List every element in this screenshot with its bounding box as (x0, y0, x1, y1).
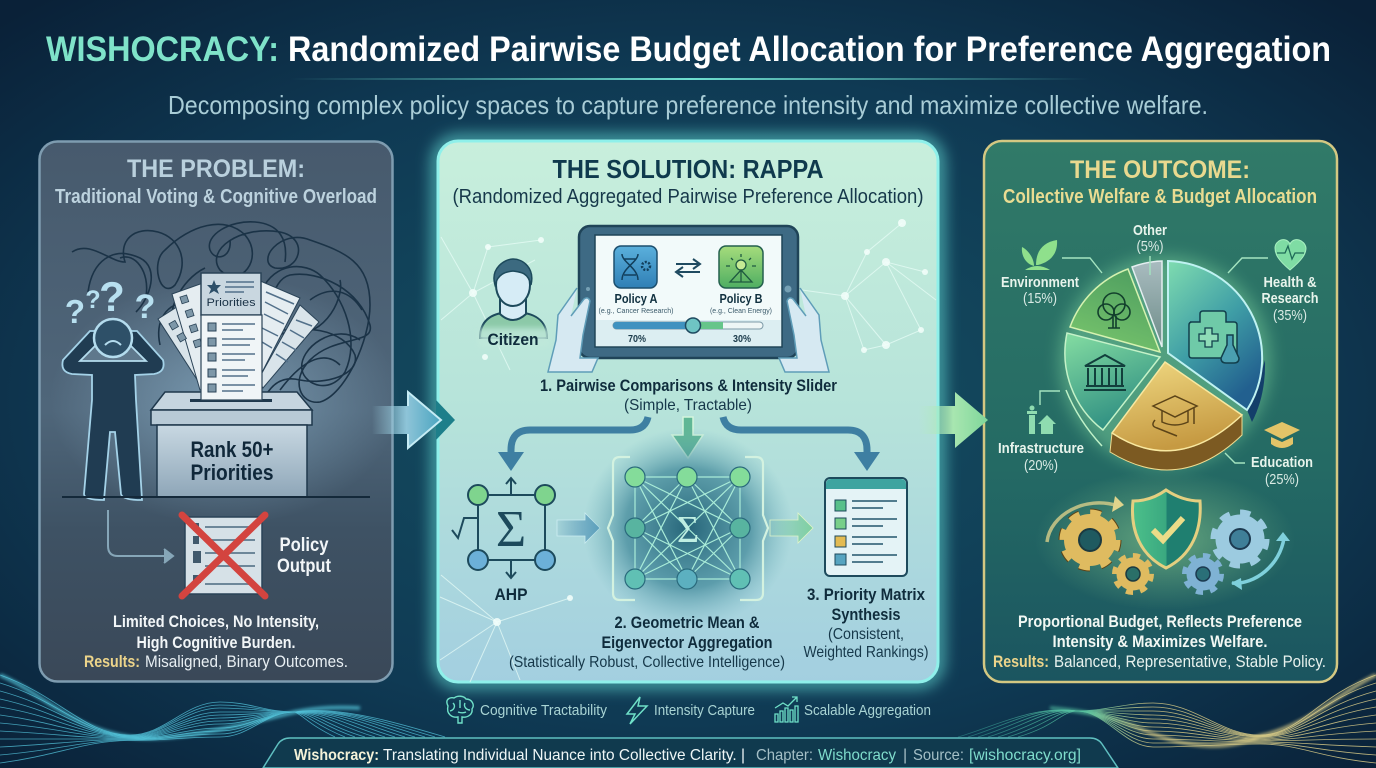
icon: aggregation network: Σ (677, 509, 699, 551)
problem subheading: Traditional Voting & Cognitive Overload (55, 186, 377, 208)
icon: swap arrows (676, 259, 700, 277)
icon: citizen: Citizen (488, 330, 538, 349)
decorative waves right (958, 675, 1376, 763)
panel: the problem (40, 142, 400, 682)
decorative waves left (0, 675, 445, 763)
footer bar: Source: (913, 747, 964, 764)
icon: heart (1275, 240, 1306, 270)
label: education: (25%) (1265, 471, 1299, 488)
icon: AHP: Σ (496, 501, 526, 558)
subtitle: Decomposing complex policy spaces to capture preference intensity and maximize collective welfare. (168, 90, 1208, 120)
arrow to output (108, 510, 173, 563)
problem summary: Results: (84, 652, 140, 671)
outcome summary: Proportional Budget, Reflects Preference (1018, 612, 1302, 631)
slider values: 30% (733, 334, 751, 345)
slice: infrastructure (1065, 333, 1160, 446)
icon: process gears and shield (1047, 490, 1290, 592)
arrow: to matrix (723, 417, 880, 471)
label: health and research: (35%) (1273, 307, 1307, 324)
icon: ballot box: Priorities (190, 460, 274, 485)
papers fan (158, 280, 319, 392)
arrow: problem to solution (372, 392, 455, 448)
step 1 text (540, 376, 837, 414)
label: health and research: Health & (1264, 274, 1317, 291)
icon: aggregation network (583, 428, 793, 628)
step 2 text: 2. Geometric Mean & (614, 613, 760, 632)
problem heading: THE PROBLEM: (127, 155, 305, 183)
small gold gear (1115, 556, 1151, 592)
label: other (1133, 222, 1167, 255)
question marks (65, 273, 155, 330)
slider values (628, 334, 751, 345)
icon: priorities card: Priorities (206, 297, 256, 309)
label: health and research: Research (1262, 290, 1318, 307)
solution heading: THE SOLUTION: RAPPA (552, 154, 824, 184)
citizen label (478, 328, 550, 348)
problem summary: Limited Choices, No Intensity, (113, 612, 319, 631)
arrow: solution to outcome (918, 392, 988, 448)
footer bar: Chapter: (756, 747, 813, 764)
pie chart (1059, 256, 1271, 470)
icon: confused person (62, 273, 164, 500)
outcome summary (993, 612, 1326, 671)
icon: lightning bolt (627, 697, 647, 724)
intensity slider (613, 318, 763, 333)
icon: graduation cap (1264, 422, 1300, 448)
step 3 text: (Consistent, (828, 626, 904, 643)
problem summary: Misaligned, Binary Outcomes. (145, 652, 348, 671)
footer text: Wishocracy: (294, 747, 379, 764)
question marks: ? (99, 273, 125, 320)
AHP label: AHP (494, 585, 528, 604)
problem summary (84, 612, 348, 671)
slider values: 70% (628, 334, 646, 345)
slice: other (1132, 261, 1162, 347)
icon: sprout (1022, 240, 1057, 270)
icon: left hand (548, 288, 598, 372)
footer bar: Translating Individual Nuance into Collective Clarity. | (383, 747, 745, 764)
step 3 text: Weighted Rankings) (804, 644, 928, 661)
icon: ballot box (151, 392, 312, 497)
tangled lines (72, 222, 370, 402)
label: infrastructure: Infrastructure (998, 440, 1084, 457)
policy labels: (e.g., Cancer Research) (598, 306, 674, 315)
slice: environment (1070, 269, 1160, 352)
slice: education (1110, 362, 1242, 470)
policy output label: Output (277, 556, 332, 577)
footer bar: [wishocracy.org] (969, 747, 1081, 764)
step 2 text: (Statistically Robust, Collective Intelligence) (509, 654, 785, 671)
ground line (62, 496, 370, 498)
label: education: Education (1251, 454, 1313, 471)
box text: Rank 50+ (190, 437, 274, 462)
icon: infrastructure (1027, 406, 1056, 434)
leader lines (1040, 256, 1268, 463)
solution subheading: (Randomized Aggregated Pairwise Preference Allocation) (452, 186, 924, 208)
label: environment (1001, 274, 1079, 307)
icon: policy output crossed out (182, 515, 265, 596)
label: infrastructure: (20%) (1024, 457, 1058, 474)
outcome subheading: Collective Welfare & Budget Allocation (1003, 186, 1317, 208)
policy output label (277, 535, 332, 577)
icon: growth chart (775, 697, 798, 722)
network backdrop (440, 223, 936, 682)
arrow: to AHP (498, 417, 648, 471)
legend: key benefits (447, 696, 931, 724)
legend: key benefits: Cognitive Tractability (480, 703, 608, 719)
title: WISHOCRACY: (46, 30, 279, 69)
label: education (1251, 454, 1313, 488)
question marks: ? (65, 293, 85, 330)
arrow: to aggregation (672, 417, 703, 458)
policy labels: (e.g., Clean Energy) (710, 306, 772, 315)
panel: the solution (438, 141, 938, 682)
slice: health and research (1168, 261, 1265, 422)
icon: brain (447, 696, 473, 723)
small blue gear (1185, 556, 1221, 592)
policy labels: Policy A (614, 291, 658, 306)
step 2 text: Eigenvector Aggregation (602, 633, 772, 652)
step 3 text: Synthesis (832, 605, 900, 624)
footer bar: Wishocracy (818, 747, 896, 764)
icon: policy B (719, 246, 763, 288)
label: environment: (15%) (1023, 290, 1057, 307)
step 3 text (804, 585, 928, 661)
footer bar (263, 738, 1118, 768)
icon: policy A (614, 246, 657, 288)
arrow: aggregation to matrix (770, 513, 813, 543)
problem summary: High Cognitive Burden. (136, 633, 296, 652)
label: other: (5%) (1136, 238, 1164, 255)
step 2 text (509, 613, 785, 671)
icon: right hand (779, 288, 829, 372)
outcome summary: Balanced, Representative, Stable Policy. (1054, 652, 1326, 671)
step 1 text: 1. Pairwise Comparisons & Intensity Slider (540, 376, 837, 395)
step 1 text: (Simple, Tractable) (624, 397, 752, 414)
icon: front ballot paper (201, 315, 262, 400)
outcome summary: Results: (993, 652, 1049, 671)
tablet (579, 226, 798, 358)
outcome heading: THE OUTCOME: (1070, 156, 1250, 184)
legend: key benefits: Scalable Aggregation (804, 703, 931, 719)
question marks: ? (85, 286, 101, 314)
icon: citizen (478, 259, 550, 349)
policy labels: Policy B (720, 291, 762, 306)
icon: AHP (452, 478, 555, 604)
policy labels (598, 291, 772, 315)
footer bar: | (903, 747, 907, 764)
panel: the outcome (984, 141, 1337, 682)
legend: key benefits: Intensity Capture (654, 703, 755, 719)
icon: priorities card (201, 273, 261, 315)
label: environment: Environment (1001, 274, 1079, 291)
blue gear (1214, 513, 1266, 565)
question marks: ? (135, 288, 155, 326)
gold gear (1063, 513, 1117, 567)
shield (1132, 490, 1200, 568)
policy output label: Policy (280, 535, 329, 556)
arrow: AHP to aggregation (557, 513, 600, 543)
step 3 text: 3. Priority Matrix (807, 585, 925, 604)
label: infrastructure (998, 440, 1084, 474)
label: health and research (1262, 274, 1318, 324)
outcome summary: Intensity & Maximizes Welfare. (1052, 632, 1268, 651)
icon: priority matrix (825, 478, 907, 576)
label: other: Other (1133, 222, 1167, 239)
